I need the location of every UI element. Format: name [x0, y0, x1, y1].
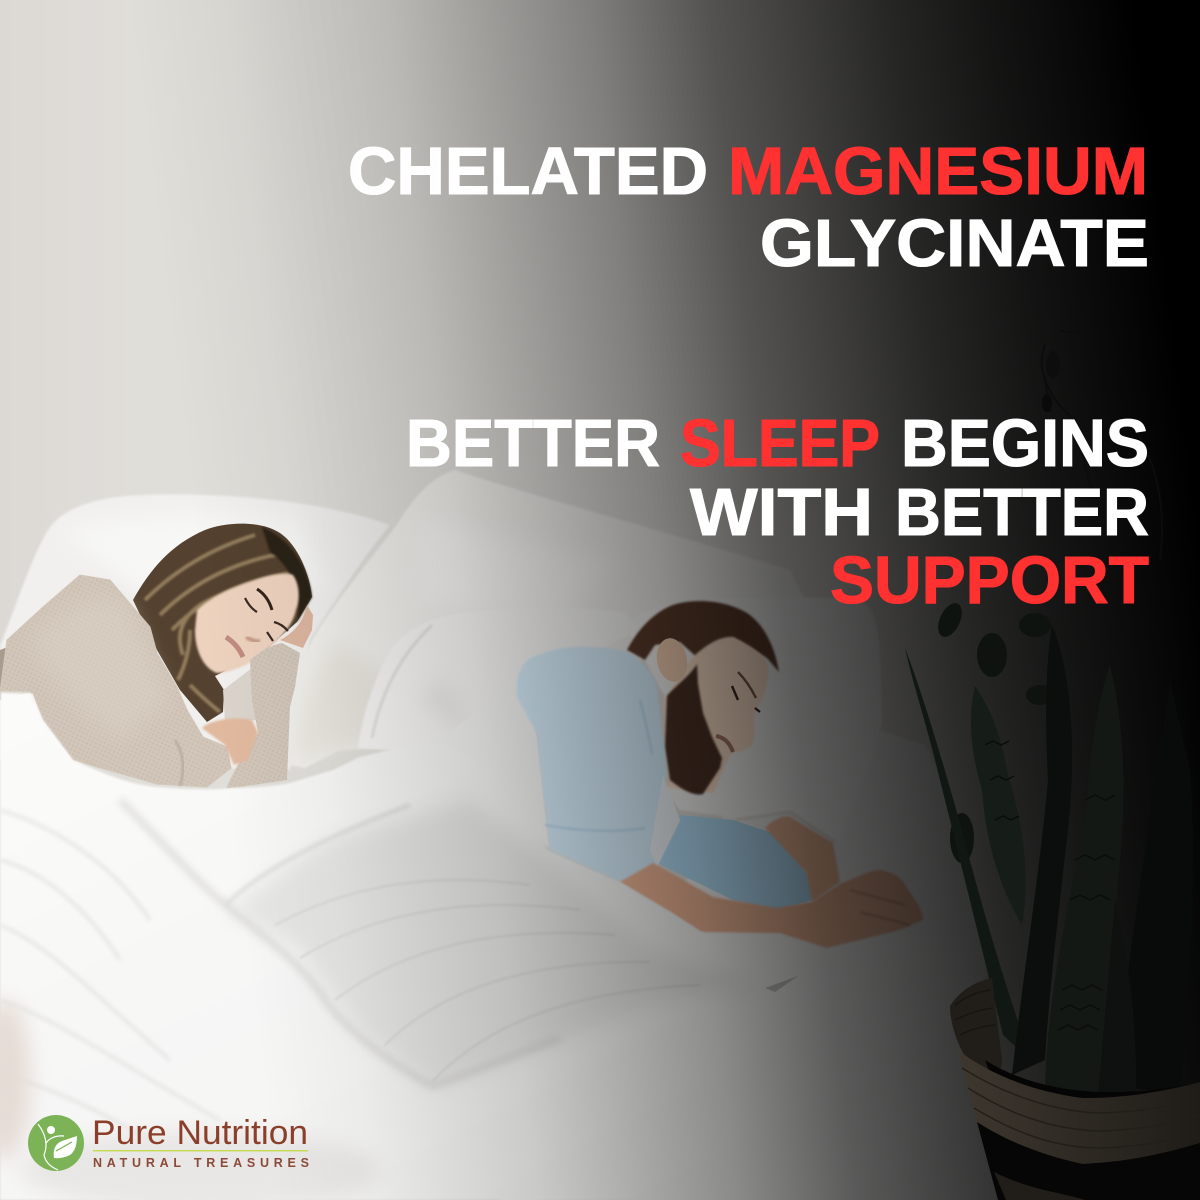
- headline: better sleep begins with better support: SUPPORT: [830, 543, 1149, 618]
- hair: [133, 524, 312, 722]
- snake plant leaves: [905, 648, 1032, 1062]
- hand: [202, 718, 258, 765]
- hand under head: [280, 605, 313, 648]
- face: [195, 574, 299, 673]
- face: [664, 637, 768, 793]
- headline: better sleep begins with better support: BEGINS: [901, 406, 1149, 481]
- tagline: NATURAL TREASURES: [93, 1156, 309, 1170]
- zigzag leaf markings: [985, 741, 1115, 1030]
- duvet: [0, 692, 1000, 1200]
- pillow: woman's pillow: [0, 494, 390, 770]
- pillow: large centre pillow: [290, 470, 810, 768]
- sheet: behind man's back: [436, 680, 550, 850]
- sweater: torso behind: [0, 640, 40, 700]
- headline: chelated magnesium glycinate: MAGNESIUM: [728, 134, 1148, 209]
- headline: chelated magnesium glycinate: GLYCINATE: [760, 206, 1149, 281]
- brand name: Pure Nutrition: [92, 1114, 308, 1152]
- basket dark band and lower rim: [977, 1122, 1200, 1200]
- logo: Pure Nutrition: [28, 1114, 309, 1171]
- shirt: sleeve in shadow: [655, 815, 812, 910]
- hair: [627, 601, 779, 672]
- headline: better sleep begins with better support: BETTER: [895, 475, 1149, 550]
- facial features: [738, 672, 756, 698]
- headline: chelated magnesium glycinate: [348, 134, 1149, 281]
- headline: better sleep begins with better support: WITH: [690, 475, 873, 550]
- basket rim: [950, 978, 1002, 1078]
- man: [517, 601, 923, 948]
- headline: better sleep begins with better support: [406, 406, 1149, 618]
- duvet warm shade bottom-left: [0, 1000, 31, 1160]
- hanging vine stems: [1042, 328, 1162, 560]
- basket woven band: [958, 1050, 1200, 1164]
- beard: [665, 664, 722, 794]
- sweater: main body and near arm: [0, 575, 231, 787]
- sweater: far arm: [226, 643, 300, 788]
- icon: leaf figure in green circle: [28, 1115, 84, 1171]
- headline: better sleep begins with better support: BETTER: [406, 406, 660, 481]
- upper arm: [765, 816, 840, 902]
- pothos leaves: [933, 351, 1060, 870]
- shirt: main: [517, 647, 680, 882]
- pillow: man's pillow: [625, 597, 882, 842]
- headline: better sleep begins with better support: SLEEP: [680, 406, 880, 481]
- facial features: [257, 589, 272, 610]
- pillow: front pillow with frayed edge: [358, 608, 640, 760]
- plant and basket: [905, 328, 1200, 1200]
- headline: chelated magnesium glycinate: CHELATED: [348, 134, 708, 209]
- duvet shading folds: [226, 800, 760, 1088]
- ear: [653, 636, 691, 684]
- sweater: shirt under neck: [223, 668, 256, 722]
- sheet: bed right side: [500, 720, 1000, 1200]
- forearm and hand: [620, 863, 923, 948]
- woman: [0, 524, 313, 788]
